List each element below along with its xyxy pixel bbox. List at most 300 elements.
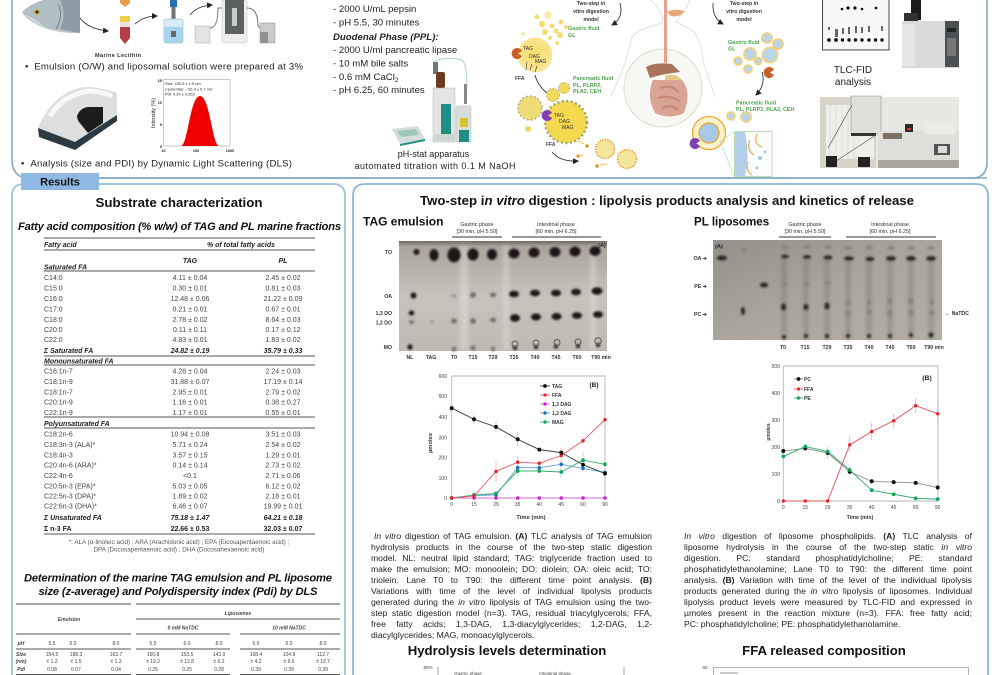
- figure: TLC of TAG emulsion: T29: [489, 355, 498, 361]
- diagram: TAG emulsion digestion model: MAG: [562, 125, 574, 131]
- table: fatty acid composition: 0.81 ± 0.03: [266, 286, 301, 292]
- chart: lipolysis products PL liposomes: µmoles: [766, 423, 772, 441]
- table: fatty acid composition: 35.79 ± 0.33: [264, 348, 303, 355]
- table: fatty acid composition: 10.94 ± 0.08: [171, 432, 210, 438]
- diagram: TAG emulsion digestion model: Pancreatic fluid: [573, 76, 613, 82]
- diagram: TAG emulsion digestion model: TAG: [523, 46, 533, 52]
- table: fatty acid composition: 0.17 ± 0.12: [266, 327, 301, 334]
- figure: TLC of TAG emulsion: T60: [573, 355, 582, 361]
- table: DLS size and PdI: PdI: [17, 667, 25, 673]
- heading: fatty acid composition: Fatty acid composition (% w/w) of TAG and PL marine fractions: [18, 221, 341, 233]
- figure: TLC of PL liposomes: T90 min: [924, 345, 944, 351]
- table: fatty acid composition: C17:0: [44, 306, 63, 314]
- chart: lipolysis products TAG emulsion: 0: [450, 502, 453, 508]
- caption: PL liposomes figure: analysis. (B) Variation with time of the level of the individual lipolysis: [684, 575, 972, 585]
- heading: PL liposomes: PL liposomes: [694, 216, 769, 228]
- table: fatty acid composition: 64.21 ± 0.18: [264, 515, 303, 522]
- diagram: TAG emulsion digestion model: PLA2, CEH: [573, 89, 601, 95]
- heading: size and PdI determination: [24, 572, 332, 598]
- tab: results: [21, 173, 987, 190]
- table: fatty acid composition: 2.79 ± 0.02: [266, 390, 301, 396]
- chart: lipolysis products PL liposomes: 100: [772, 472, 780, 478]
- text: digestion conditions: - 2000 U/ml pancreatic lipase: [333, 45, 457, 56]
- text: digestion conditions: 2: [395, 77, 399, 84]
- table: DLS size and PdI: ± 1.3: [110, 659, 122, 665]
- figure: TLC of PL liposomes: T60: [907, 345, 916, 351]
- figure: TLC of PL liposomes: OA ➔: [694, 256, 708, 262]
- chart: lipolysis products PL liposomes: 29: [825, 505, 831, 511]
- table: fatty acid composition: C18:1n-7: [44, 390, 73, 396]
- table: DLS size and PdI: 154.5: [46, 652, 58, 658]
- table: DLS size and PdI: (nm): [16, 659, 27, 665]
- caption: TAG emulsion figure: In vitro digestion of TAG emulsion. (A) TLC analysis of TAG emulsion: [374, 531, 652, 541]
- chart: lipolysis products PL liposomes: 0: [777, 499, 780, 505]
- diagram: liposome digestion model: Pancreatic fluid: [736, 100, 776, 106]
- caption: TAG emulsion figure: free fatty acids; 1,3-DAG, 1,3-diacylglycerides; 1,2-DAG, 1,2-: [371, 619, 652, 629]
- table: fatty acid composition: Monounsaturated FA: [44, 358, 114, 366]
- table: DLS size and PdI: ± 1.5: [70, 659, 82, 665]
- footnote: abbreviations: DPA (Docosapentaenoic acid) ; DHA (Docosahexaenoic acid): [93, 546, 265, 554]
- chart: size distribution: PdI: 0.20 ± 0.003: [165, 92, 195, 96]
- table: fatty acid composition: [43, 238, 315, 534]
- figure: TLC of TAG emulsion: 1,2 DO: [376, 320, 392, 326]
- table: fatty acid composition: C14:0: [44, 275, 63, 282]
- caption: PL liposomes figure: phosphatidylethanolamine; Lane T0 to T90: the different time point: [684, 564, 972, 574]
- figure: TLC of PL liposomes: PC ➔: [694, 312, 708, 318]
- figure: TLC of PL liposomes: Intestinal phase: [871, 222, 909, 228]
- chart: hydrolysis levels (cropped): 90%: [423, 665, 433, 670]
- chart: lipolysis products TAG emulsion: 400: [439, 415, 447, 421]
- table: fatty acid composition: C22:1n-9: [44, 410, 73, 417]
- table: fatty acid composition: 3.51 ± 0.03: [266, 432, 301, 438]
- icon: lecithin tube: [120, 16, 130, 44]
- chart: hydrolysis levels (cropped): [423, 665, 624, 675]
- table: fatty acid composition: 17.19 ± 0.14: [264, 379, 303, 386]
- table: fatty acid composition: 0.67 ± 0.01: [266, 306, 301, 314]
- table: fatty acid composition: 2.54 ± 0.02: [266, 442, 301, 449]
- figure: TLC of TAG emulsion: NL: [407, 355, 414, 361]
- figure: TLC of PL liposomes: T45: [886, 345, 895, 351]
- table: DLS size and PdI: 150.8: [147, 652, 159, 658]
- chart: lipolysis products PL liposomes: 200: [772, 445, 780, 451]
- table: fatty acid composition: 32.03 ± 0.07: [264, 526, 303, 533]
- image: TLC plate mini: [822, 0, 889, 50]
- figure: TLC of PL liposomes: PE ➔: [694, 284, 708, 290]
- figure: TLC of TAG emulsion: TO: [385, 250, 392, 256]
- chart: lipolysis products TAG emulsion: FFA: [552, 393, 562, 399]
- table: fatty acid composition: % of total fatty acids: [207, 242, 275, 249]
- table: fatty acid composition: C18:2n-6: [44, 432, 73, 438]
- figure: TLC of TAG emulsion: [376, 222, 611, 361]
- figure: TLC of TAG emulsion: T15: [469, 355, 478, 361]
- table: fatty acid composition: 1.83 ± 0.02: [266, 337, 301, 344]
- chart: lipolysis products TAG emulsion: 60: [580, 502, 586, 508]
- diagram: TAG emulsion digestion model: [512, 1, 636, 168]
- figure: TLC of TAG emulsion: [60 min, pH 6.25]: [535, 229, 577, 235]
- table: fatty acid composition: 1.16 ± 0.01: [173, 400, 208, 406]
- table: fatty acid composition: 1.29 ± 0.01: [266, 452, 301, 460]
- table: DLS size and PdI: 0.39: [284, 667, 294, 673]
- table: fatty acid composition: Σ n-3 FA: [44, 526, 72, 533]
- figure: TLC of TAG emulsion: [30 min, pH 5.50]: [456, 229, 498, 235]
- table: fatty acid composition: PL: [279, 258, 287, 265]
- table: DLS size and PdI: 0.39: [251, 667, 261, 673]
- diagram: TAG emulsion digestion model: TAG: [554, 113, 564, 119]
- table: DLS size and PdI: 143.9: [213, 652, 225, 658]
- table: DLS size and PdI: Emulsion: [58, 617, 80, 623]
- table: DLS size and PdI: 5.5: [150, 641, 157, 647]
- table: DLS size and PdI: ± 6.2: [213, 659, 225, 665]
- icon: microfluidizer: [195, 0, 275, 43]
- table: fatty acid composition: Fatty acid: [44, 242, 77, 249]
- chart: lipolysis products PL liposomes: 40: [869, 505, 875, 511]
- chart: lipolysis products TAG emulsion: 600: [439, 374, 447, 380]
- caption: PL liposomes figure: liposome hydrolysis in the course of the two-step static in vitro: [684, 542, 972, 552]
- diagram: liposome digestion model: Gastric fluid: [728, 40, 759, 46]
- chart: lipolysis products PL liposomes: (B): [922, 375, 932, 382]
- chart: lipolysis products TAG emulsion: (B): [589, 382, 599, 389]
- table: DLS size and PdI: 6.0: [70, 641, 77, 647]
- diagram: TAG emulsion digestion model: model: [583, 17, 599, 23]
- text: digestion conditions: - 0.6 mM CaCl: [333, 72, 395, 83]
- chart: lipolysis products TAG emulsion: TAG: [552, 384, 562, 390]
- table: fatty acid composition: 0.38 ± 0.27: [266, 400, 301, 406]
- tab: results: Results: [40, 176, 80, 188]
- table: DLS size and PdI: 5.5: [49, 641, 56, 647]
- caption: TAG emulsion figure: step static digestion model (n=3). TAG, residual triacylglycerols; FFA,: [371, 608, 652, 618]
- text: digestion conditions: - pH 6.25, 60 minutes: [333, 85, 425, 96]
- chart: lipolysis products PL liposomes: 0: [782, 505, 785, 511]
- table: fatty acid composition: C20:0: [44, 327, 63, 334]
- table: DLS size and PdI: ± 1.2: [46, 659, 58, 665]
- table: fatty acid composition: C15:0: [44, 286, 63, 292]
- table: fatty acid composition: C22:6n-3 (DHA)*: [44, 504, 97, 510]
- caption: PL liposomes figure: In vitro digestion of liposome phospholipids. (A) TLC analysis of: [684, 531, 972, 541]
- table: fatty acid composition: C16:0: [44, 296, 63, 303]
- chart: lipolysis products TAG emulsion: 15: [471, 502, 477, 508]
- table: fatty acid composition: C22:0: [44, 337, 63, 344]
- table: fatty acid composition: 5.71 ± 0.24: [173, 442, 208, 449]
- table: fatty acid composition: C22:4n-6: [44, 473, 73, 480]
- table: fatty acid composition: 4.28 ± 0.04: [173, 368, 208, 376]
- caption: TAG emulsion figure: Variations with time of the level of individual lipolysis products: [371, 586, 652, 596]
- table: fatty acid composition: C18:0: [44, 317, 63, 324]
- figure: TLC of TAG emulsion: T35: [510, 355, 519, 361]
- table: DLS size and PdI: ± 12.8: [180, 659, 194, 665]
- figure: TLC of PL liposomes: T40: [865, 345, 874, 351]
- table: DLS size and PdI: 6.0: [286, 641, 293, 647]
- chart: lipolysis products TAG emulsion: 90: [602, 502, 608, 508]
- table: fatty acid composition: 2.78 ± 0.02: [173, 317, 208, 324]
- table: fatty acid composition: 31.88 ± 0.07: [171, 379, 210, 386]
- figure: TLC of TAG emulsion: OA: [384, 294, 392, 300]
- chart: size distribution: 10: [158, 101, 162, 105]
- diagram: TAG emulsion digestion model: GL: [568, 33, 576, 39]
- chart: lipolysis products PL liposomes: 300: [772, 418, 780, 424]
- table: DLS size and PdI: Liposomes: [225, 611, 251, 617]
- caption: TAG emulsion figure: diacylglycerides; MAG, monoacylglycerols.: [371, 630, 534, 640]
- table: DLS size and PdI: 0.25: [148, 667, 158, 673]
- figure: TLC of PL liposomes: Gastric phase: [788, 222, 822, 228]
- caption: PL liposomes figure: PC: phosphatidylcholine; PE: phosphatidylethanolamine.: [684, 619, 900, 629]
- chart: lipolysis products PL liposomes: 35: [847, 505, 853, 511]
- table: fatty acid composition: C18:1n-9: [44, 379, 73, 386]
- chart: lipolysis products TAG emulsion: 500: [439, 394, 447, 400]
- table: DLS size and PdI: pH: [17, 641, 25, 647]
- caption: TAG emulsion figure: model. NL: neutral lipid standard; TAG: triglyceride fraction used to: [371, 553, 652, 563]
- figure: TLC of PL liposomes: ← NaTDC: [945, 311, 969, 317]
- heading: hydrolysis levels: Hydrolysis levels determination: [408, 643, 606, 658]
- table: fatty acid composition: <0.1: [183, 473, 197, 480]
- table: DLS size and PdI: ± 19.2: [146, 659, 160, 665]
- table: DLS size and PdI: 0.07: [71, 667, 81, 673]
- chart: FFA composition (cropped): 80: [702, 665, 708, 670]
- figure: TLC of TAG emulsion: T0: [451, 355, 457, 361]
- table: fatty acid composition: 0.30 ± 0.01: [173, 286, 208, 292]
- figure: TLC of TAG emulsion: T90 min: [591, 355, 611, 361]
- figure: TLC of TAG emulsion: 1,3 DO: [376, 311, 392, 317]
- table: fatty acid composition: 6.46 ± 0.07: [173, 504, 208, 510]
- table: DLS size and PdI: 5.5: [253, 641, 260, 647]
- chart: size distribution: 15: [158, 79, 162, 83]
- caption: PL liposomes figure: µmoles present in the reaction mixture (n=3). FFA: free fatty acid;: [684, 608, 972, 618]
- table: DLS size and PdI: 163.7: [110, 652, 122, 658]
- chart: lipolysis products TAG emulsion: 200: [439, 456, 447, 462]
- table: DLS size and PdI: ± 9.6: [283, 659, 295, 665]
- table: DLS size and PdI: 0 mM NaTDC: [168, 626, 199, 632]
- icon: oil tube: [120, 0, 130, 7]
- chart: lipolysis products PL liposomes: PE: [804, 396, 811, 402]
- table: fatty acid composition: Σ Unsaturated FA: [43, 515, 102, 522]
- diagram: TAG emulsion digestion model: Two-step in: [577, 1, 605, 7]
- table: fatty acid composition: 1.17 ± 0.01: [173, 410, 208, 417]
- figure: TLC of TAG emulsion: Intestinal phase: [537, 222, 575, 228]
- chart: lipolysis products TAG emulsion: 1,3 DAG: [552, 402, 572, 408]
- table: fatty acid composition: 1.89 ± 0.02: [173, 494, 208, 500]
- footnote: abbreviations: *: ALA (α-linoleic acid) ; ARA (Arachidonic acid) ; EPA (Eicosapentaenoic acid) ;: [69, 539, 290, 546]
- caption: PL liposomes figure: lipolysis product levels were measured by TLC-FID and expressed in: [684, 597, 972, 607]
- chart: lipolysis products TAG emulsion: 29: [493, 502, 499, 508]
- table: DLS size and PdI: 0.28: [214, 667, 224, 673]
- diagram: liposome digestion model: PL, PLRP2, PLA2, CEH: [736, 107, 795, 113]
- arrow: homogenizer to microfluidizer: [190, 5, 212, 15]
- chart: lipolysis products PL liposomes: 400: [772, 391, 780, 397]
- chart: lipolysis products TAG emulsion: 35: [515, 502, 521, 508]
- table: fatty acid composition: 4.83 ± 0.01: [173, 337, 208, 344]
- table: fatty acid composition: TAG: [183, 258, 198, 265]
- chart: lipolysis products PL liposomes: 60: [913, 505, 919, 511]
- table: DLS size and PdI: Size: [16, 652, 26, 658]
- figure: TLC of TAG emulsion: T40: [531, 355, 540, 361]
- table: fatty acid composition: 19.99 ± 0.01: [264, 504, 303, 510]
- chart: size distribution: 100: [193, 149, 199, 153]
- table: fatty acid composition: 4.11 ± 0.04: [173, 275, 207, 282]
- caption: pH-stat: pH-stat apparatus: [398, 149, 470, 159]
- chart: lipolysis products PL liposomes: 90: [935, 505, 941, 511]
- text: digestion conditions: - 2000 U/mL pepsin: [333, 4, 416, 15]
- table: fatty acid composition: 0.21 ± 0.01: [173, 306, 208, 314]
- table: DLS size and PdI: 10 mM NaTDC: [272, 626, 306, 632]
- table: fatty acid composition: C18:4n-3: [44, 452, 73, 460]
- chart: size distribution: 5: [160, 123, 162, 127]
- heading: two-step in vitro digestion: Two-step in vitro digestion : lipolysis products analysis and kinetics of release: [420, 193, 914, 208]
- arrow: fish to lecithin: [80, 18, 108, 31]
- table: DLS size and PdI: 153.5: [181, 652, 193, 658]
- table: fatty acid composition: C20:1n-9: [44, 400, 73, 406]
- table: fatty acid composition: C20:5n-3 (EPA)*: [44, 484, 96, 490]
- table: DLS size and PdI: ± 12.7: [316, 659, 330, 665]
- table: fatty acid composition: C18:3n-3 (ALA)*: [44, 442, 96, 449]
- icon: homogenizer and beaker: [164, 0, 183, 43]
- chart: lipolysis products PL liposomes: 45: [891, 505, 897, 511]
- image: TLC-FID instrument photo: [820, 96, 959, 168]
- table: DLS size and PdI: 108.4: [250, 652, 262, 658]
- chart: FFA composition (cropped): [702, 665, 968, 675]
- diagram: human digestive tract: [610, 0, 715, 127]
- chart: lipolysis products TAG emulsion: 40: [537, 502, 542, 508]
- diagram: TAG emulsion digestion model: DAG: [529, 54, 540, 60]
- label: marine lecithin: Marine Lecithin: [95, 53, 142, 59]
- table: fatty acid composition: 8.64 ± 0.03: [266, 317, 301, 324]
- chart: size distribution: ζ-potential: − 52.4 ± 0.7 mV: [165, 86, 213, 92]
- chart: lipolysis products PL liposomes: 15: [803, 505, 808, 511]
- chart: lipolysis products TAG emulsion: 300: [439, 436, 447, 442]
- figure: TLC of PL liposomes: (A): [715, 244, 723, 250]
- table: fatty acid composition: 2.71 ± 0.06: [266, 473, 301, 480]
- chart: lipolysis products PL liposomes: FFA: [804, 387, 814, 393]
- table: fatty acid composition: 6.12 ± 0.02: [266, 484, 301, 490]
- icon: fish: [22, 0, 80, 33]
- figure: TLC of TAG emulsion: T45: [552, 355, 561, 361]
- figure: TLC of PL liposomes: T0: [780, 345, 786, 351]
- table: fatty acid composition: 0.55 ± 0.01: [266, 410, 301, 417]
- table: DLS size and PdI: 112.7: [317, 652, 329, 658]
- table: fatty acid composition: 0.11 ± 0.11: [173, 327, 207, 334]
- footnote: abbreviations: [69, 539, 290, 554]
- chart: lipolysis products PL liposomes: [766, 364, 941, 521]
- text: digestion conditions: - 10 mM bile salts: [333, 58, 408, 70]
- panel: results right: [353, 184, 988, 675]
- table: fatty acid composition: C20:4n-6 (ARA)*: [44, 462, 97, 470]
- heading: substrate characterization: Substrate characterization: [95, 195, 263, 210]
- chart: size distribution: 10: [161, 149, 166, 153]
- caption: pH-stat: automated titration with 0.1 M NaOH: [354, 161, 516, 171]
- chart: lipolysis products TAG emulsion: 0: [444, 496, 447, 502]
- chart: size distribution: 0: [160, 145, 162, 149]
- heading: FFA released composition: FFA released composition: [742, 643, 906, 658]
- diagram: TAG emulsion digestion model: PL, PLRP2,: [573, 83, 602, 89]
- diagram: liposome digestion model: vitro digestion: [726, 9, 762, 15]
- chart: lipolysis products TAG emulsion: [428, 374, 608, 521]
- table: fatty acid composition: C22:5n-3 (DPA)*: [44, 494, 96, 500]
- figure: TLC of TAG emulsion: (A): [598, 243, 606, 249]
- chart: lipolysis products TAG emulsion: µmoles: [428, 433, 434, 453]
- text: emulsion bullet: • Emulsion (O/W) and liposomal solution were prepared at 3%: [25, 62, 303, 72]
- label: TLC-FID analysis: TLC-FID: [834, 65, 872, 76]
- caption: PL liposomes figure: [684, 531, 972, 629]
- heading: TAG emulsion: TAG emulsion: [363, 214, 443, 228]
- table: fatty acid composition: 3.57 ± 0.15: [173, 452, 208, 460]
- table: DLS size and PdI: [16, 604, 340, 674]
- table: DLS size and PdI: 0.25: [182, 667, 192, 673]
- table: fatty acid composition: Saturated FA: [44, 264, 87, 272]
- table: fatty acid composition: Σ Saturated FA: [43, 348, 93, 355]
- chart: lipolysis products TAG emulsion: 45: [559, 502, 564, 508]
- table: DLS size and PdI: 0.39: [318, 667, 328, 673]
- figure: TLC of PL liposomes: T35: [844, 345, 853, 351]
- figure: TLC of TAG emulsion: TAG: [426, 355, 436, 361]
- table: fatty acid composition: 2.18 ± 0.01: [266, 494, 301, 500]
- figure: TLC of PL liposomes: [60 min, pH 6.25]: [869, 229, 911, 235]
- figure: TLC of TAG emulsion: MO: [384, 345, 392, 351]
- icon: pH-stat apparatus: [392, 58, 471, 146]
- caption: TAG emulsion figure: generated during the in vitro lipolysis of TAG emulsion using the two-: [371, 597, 652, 607]
- caption: TAG emulsion figure: [371, 531, 652, 640]
- heading: size and PdI determination: Determination of the marine TAG emulsion and PL liposome: [24, 572, 332, 584]
- icon: dynamic light scattering instrument: [38, 87, 117, 150]
- table: fatty acid composition: 2.45 ± 0.02: [266, 275, 301, 282]
- arrow: tube to homogenizer: [135, 16, 157, 24]
- figure: TLC of PL liposomes: [694, 222, 969, 351]
- text: digestion conditions: [333, 4, 457, 96]
- diagram: TAG emulsion digestion model: FFA: [546, 142, 556, 148]
- panel: results left: [12, 184, 345, 675]
- figure: TLC of PL liposomes: [30 min, pH 5.50]: [784, 229, 826, 235]
- chart: lipolysis products TAG emulsion: MAG: [552, 420, 564, 426]
- caption: TAG emulsion figure: triolein. Lane T0 to T90: the different time point analysis. (B): [371, 575, 652, 585]
- chart: lipolysis products TAG emulsion: Time (min): [516, 515, 546, 521]
- table: fatty acid composition: 75.18 ± 1.47: [171, 515, 211, 522]
- text: digestion conditions: - pH 5.5, 30 minutes: [333, 18, 420, 28]
- chart: lipolysis products PL liposomes: PC: [804, 377, 811, 383]
- caption: PL liposomes figure: digestion. PC: standard phosphatidylcholine; PE: standard: [684, 553, 972, 563]
- table: DLS size and PdI: 188.3: [70, 652, 82, 658]
- table: fatty acid composition: 2.73 ± 0.02: [266, 462, 301, 470]
- table: fatty acid composition: 22.66 ± 0.53: [171, 526, 210, 533]
- chart: size distribution: [151, 79, 234, 153]
- table: DLS size and PdI: 8.0: [216, 641, 223, 647]
- table: DLS size and PdI: ± 4.2: [250, 659, 262, 665]
- table: fatty acid composition: 2.95 ± 0.01: [173, 390, 208, 396]
- diagram: liposome digestion model: Two-step in: [730, 1, 758, 7]
- image: gas chromatograph: [902, 0, 959, 68]
- label: TLC-FID analysis: analysis: [835, 77, 871, 88]
- heading: size and PdI determination: size (z-average) and Polydispersity index (Pdi) by DLS: [38, 586, 318, 598]
- label: TLC-FID analysis: [834, 65, 872, 88]
- table: DLS size and PdI: 0.04: [111, 667, 121, 673]
- figure: TLC of PL liposomes: T15: [801, 345, 810, 351]
- table: fatty acid composition: 24.82 ± 0.19: [170, 348, 210, 355]
- caption: TAG emulsion figure: hydrolysis products in the course of the two-step static digestion: [371, 542, 652, 552]
- caption: TAG emulsion figure: make the emulsion; MO: monoolein; DO: diolein; OA: oleic acid; TO:: [371, 564, 652, 574]
- table: fatty acid composition: 2.24 ± 0.03: [266, 368, 301, 376]
- chart: lipolysis products PL liposomes: Time (min): [847, 515, 874, 521]
- table: DLS size and PdI: 8.0: [320, 641, 327, 647]
- diagram: liposome digestion model: [690, 1, 795, 176]
- figure: TLC of PL liposomes: T29: [823, 345, 832, 351]
- chart: lipolysis products PL liposomes: 500: [772, 364, 780, 370]
- diagram: TAG emulsion digestion model: Gastric fluid: [568, 26, 599, 32]
- table: fatty acid composition: 21.22 ± 0.09: [264, 296, 303, 303]
- table: fatty acid composition: 0.14 ± 0.14: [173, 462, 208, 470]
- table: DLS size and PdI: 6.0: [184, 641, 191, 647]
- caption: PL liposomes figure: products generated during the in vitro lipolysis of liposomes. Individual: [684, 586, 972, 596]
- text: digestion conditions: Duodenal Phase (PPL):: [333, 32, 439, 43]
- text: analysis bullet: • Analysis (size and PDI) by Dynamic Light Scattering (DLS): [21, 158, 292, 170]
- table: fatty acid composition: C16:1n-7: [44, 368, 73, 376]
- table: DLS size and PdI: 8.0: [113, 641, 120, 647]
- table: DLS size and PdI: 0.08: [47, 667, 57, 673]
